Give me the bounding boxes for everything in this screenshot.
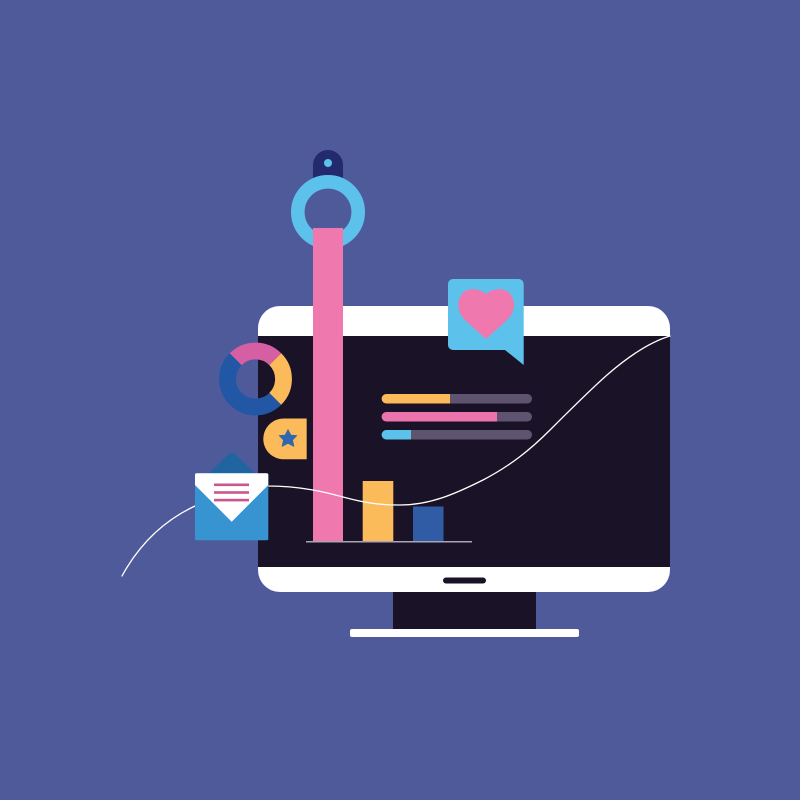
bar chart xyxy=(306,228,472,542)
monitor stand base xyxy=(350,629,579,637)
monitor xyxy=(258,306,670,637)
letter text lines xyxy=(214,484,249,501)
monitor button xyxy=(443,578,486,584)
donut chart xyxy=(228,351,284,407)
donut segment: pink xyxy=(236,351,275,359)
progress bar: yellow xyxy=(382,394,532,404)
speech bubble xyxy=(448,279,524,365)
progress bar: blue xyxy=(382,430,532,440)
chart baseline xyxy=(306,541,472,542)
envelope letter xyxy=(195,473,268,522)
envelope body xyxy=(195,473,268,540)
donut segment: blue xyxy=(228,359,275,407)
monitor screen xyxy=(258,336,670,567)
star badge xyxy=(263,418,307,459)
donut segment: yellow xyxy=(275,359,284,399)
bar: yellow xyxy=(363,481,393,542)
monitor stand neck xyxy=(393,590,536,630)
trend line xyxy=(122,336,670,576)
icon: star xyxy=(279,430,297,446)
progress bar: pink xyxy=(382,412,532,422)
progress bars xyxy=(382,394,532,440)
envelope back flap xyxy=(208,453,256,474)
icon: heart xyxy=(458,289,514,339)
bar: pink xyxy=(313,228,343,542)
pendant tag xyxy=(313,150,343,180)
monitor bezel xyxy=(258,306,670,592)
icon: envelope xyxy=(195,453,268,540)
ring xyxy=(298,182,358,242)
bar: blue xyxy=(413,506,444,542)
